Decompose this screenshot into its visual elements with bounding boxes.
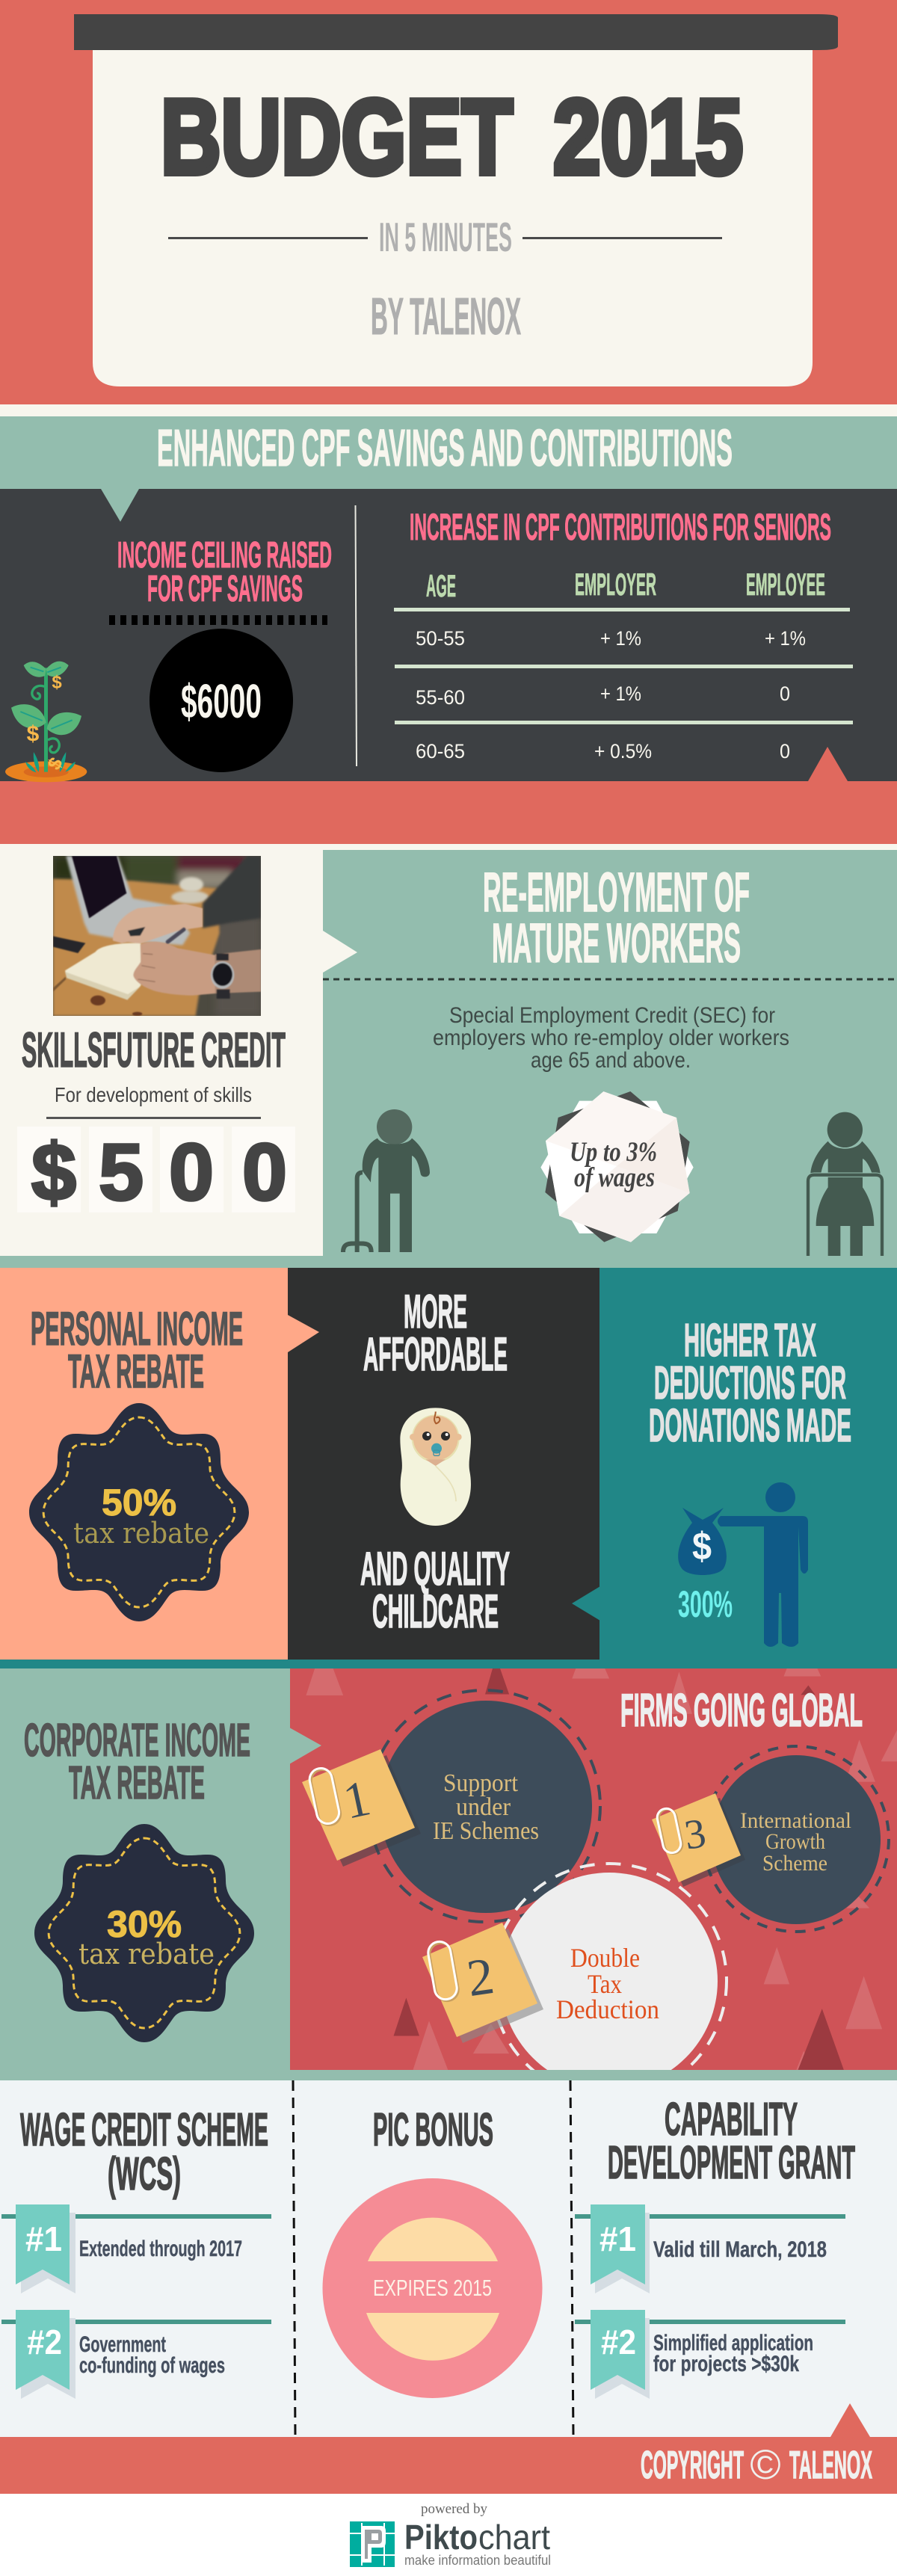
amount tiles: $500: $ [31,1127,76,1217]
table: CPF contributions: 0 [780,740,790,762]
table: CPF contributions: + 1% [600,682,641,705]
icon: person donating money bag [678,1482,808,1647]
ribbon #1: #1 [599,2219,636,2258]
photo: hands writing in notebook [53,856,261,1016]
item 1: IE schemes: 1 [339,1769,375,1830]
badge: 50% tax rebate: 50% [102,1482,176,1523]
piktochart attribution: chart [478,2518,550,2557]
heading: personal income: TAX REBATE [68,1346,204,1398]
icon: piktochart logo [350,2521,395,2567]
icon: person donating money bag: $ [692,1525,712,1568]
ribbon #1: #1 [25,2219,62,2258]
heading: income ceiling: FOR CPF SAVINGS [147,569,303,609]
column: capability development grant: Valid till March, 2018 [653,2237,827,2262]
body text: SEC: age 65 and above. [531,1048,691,1073]
amount tiles: $500: 0 [169,1127,214,1217]
piktochart attribution [0,2494,897,2576]
heading: corporate income: TAX REBATE [69,1757,205,1809]
divider [356,505,357,766]
icon: money plant: $ [52,673,62,693]
panel: schemes section [0,2080,897,2437]
column: wage credit scheme: Government [79,2332,166,2357]
triangle pattern [306,1633,897,2070]
heading: and quality childcare [360,1543,510,1638]
subtitle: in 5 minutes [168,214,722,260]
item 2: double tax deduction [422,1862,728,2070]
panel: title header [0,0,897,404]
column: capability development grant: for projects >$30k [653,2352,799,2376]
ribbon #1 [16,2204,75,2293]
panel: skillsfuture credit [17,856,295,1212]
amount tiles: $500 [17,1127,295,1217]
heading: income ceiling [117,535,332,609]
panel: title header: BY TALENOX [371,287,521,345]
panel: skillsfuture credit: SKILLSFUTURE CREDIT [22,1022,286,1077]
panel: schemes section: WAGE CREDIT SCHEME [20,2104,268,2156]
body text: SEC [433,1003,789,1073]
figure: 300%: 300% [678,1583,733,1625]
item 1: IE schemes [302,1690,600,1922]
caption: development of skills: For development of skills [55,1083,252,1106]
badge: up to 3% of wages: Up to 3% [570,1137,657,1168]
item 3: international growth scheme: 3 [682,1810,709,1859]
badge: up to 3% of wages: of wages [574,1162,655,1193]
icon: old woman with walker [808,1112,882,1256]
chevron: teal [289,1728,321,1764]
emblem: expires 2015 [323,2178,543,2398]
item 2: double tax deduction: Tax [588,1969,622,1999]
chevron: peach [288,1315,319,1352]
piktochart attribution: make information beautiful [404,2553,551,2568]
item 2: double tax deduction: Double [570,1943,640,1973]
paper card [93,45,813,386]
panel: firms going global [290,1668,897,2070]
icon: old man with cane [343,1109,430,1252]
table: CPF contributions: 55-60 [416,686,465,709]
pointer arrow: red [808,747,848,781]
heading: corporate income [24,1715,250,1809]
ribbon #1 [591,2204,650,2293]
badge: up to 3% of wages [540,1091,694,1242]
table: CPF contributions [394,567,853,762]
item 2: double tax deduction: Deduction [556,1994,659,2024]
amount tiles: $500: 5 [99,1127,144,1217]
piktochart attribution: Pikto [404,2518,478,2557]
table: CPF contributions: 60-65 [416,740,465,762]
panel: affordable childcare: AND QUALITY [360,1543,510,1595]
heading: re-employment [483,861,750,974]
panel: affordable childcare [288,1268,599,1660]
item 1: IE schemes: under [456,1793,511,1821]
icon: money plant [5,662,87,782]
chevron [323,931,357,973]
title: BUDGET [161,78,513,197]
emblem: expires 2015: EXPIRES 2015 [373,2275,492,2301]
icon: swaddled baby [400,1408,471,1526]
subtitle: in 5 minutes: IN 5 MINUTES [379,214,512,260]
icon: money plant: $ [27,722,40,747]
title: 2015 [553,78,743,197]
copyright text: © [750,2441,781,2488]
panel: re-employment of mature workers [0,850,897,1268]
item 2: double tax deduction: 2 [463,1947,497,2008]
table: CPF contributions: AGE [426,568,456,603]
body text: SEC: Special Employment Credit (SEC) for [449,1003,775,1028]
table: CPF contributions: 50-55 [416,627,465,650]
badge: 30% tax rebate [34,1824,254,2042]
table: CPF contributions: 0 [780,682,790,705]
icon: money plant: $ [44,754,67,774]
badge: 30% tax rebate: tax rebate [78,1938,215,1970]
ribbon #2 [16,2310,75,2399]
panel: affordable childcare: CHILDCARE [372,1586,499,1638]
circle: $6000: $6000 [181,674,262,728]
column: wage credit scheme: Extended through 2017 [79,2237,242,2261]
column: wage credit scheme [1,2104,271,2399]
badge: 50% tax rebate [29,1403,249,1621]
panel: enhanced CPF savings [0,416,897,844]
heading: personal income [31,1303,243,1398]
table: CPF contributions: + 1% [765,627,806,650]
heading: more affordable: MORE [404,1286,467,1338]
item 3: international growth scheme [652,1746,889,1932]
item 3: international growth scheme: International [740,1808,851,1833]
item 1: IE schemes: IE Schemes [433,1817,539,1845]
panel: personal income tax rebate [0,1268,289,1660]
heading: more affordable [363,1286,508,1381]
panel: enhanced CPF savings: INCOME CEILING RAISED [117,535,332,576]
ribbon #2: #2 [27,2323,62,2361]
amount tiles: $500: 0 [242,1127,287,1217]
item 3: international growth scheme: Scheme [762,1851,827,1876]
badge: 50% tax rebate: tax rebate [73,1517,209,1550]
piktochart attribution: powered by [421,2501,487,2517]
table: CPF contributions: + 0.5% [594,740,652,762]
ribbon #2 [591,2310,650,2399]
panel: higher tax deductions [0,1268,897,1668]
panel: corporate income tax rebate: CORPORATE INCOME [24,1715,250,1766]
badge: 30% tax rebate: 30% [107,1903,182,1945]
dark card bar [74,14,838,50]
column: wage credit scheme: (WCS) [108,2148,181,2200]
item 1: IE schemes: Support [443,1769,519,1797]
panel: personal income tax rebate: PERSONAL INCOME [31,1303,243,1355]
item 3: international growth scheme: Growth [765,1829,825,1854]
column: capability development grant [575,2094,855,2399]
panel: affordable childcare: AFFORDABLE [363,1328,508,1381]
body text: SEC: employers who re-employ older workers [433,1026,789,1050]
dashed bar [109,615,327,625]
heading: higher tax deductions [649,1315,851,1452]
column: PIC bonus: PIC BONUS [373,2104,493,2156]
chevron: teal [572,1586,600,1621]
column: capability development grant: Simplified application [653,2331,813,2355]
copyright text: COPYRIGHT [641,2444,744,2487]
column: PIC bonus [323,2104,543,2398]
panel: corporate income tax rebate [0,1668,897,2080]
pointer arrow [101,489,139,522]
column: wage credit scheme: co-funding of wages [79,2353,225,2378]
ribbon #2: #2 [601,2323,636,2361]
table: CPF contributions: EMPLOYER [575,567,656,602]
panel: copyright footer [0,2403,897,2494]
table: CPF contributions: + 1% [600,627,641,650]
circle: $6000 [150,629,293,772]
